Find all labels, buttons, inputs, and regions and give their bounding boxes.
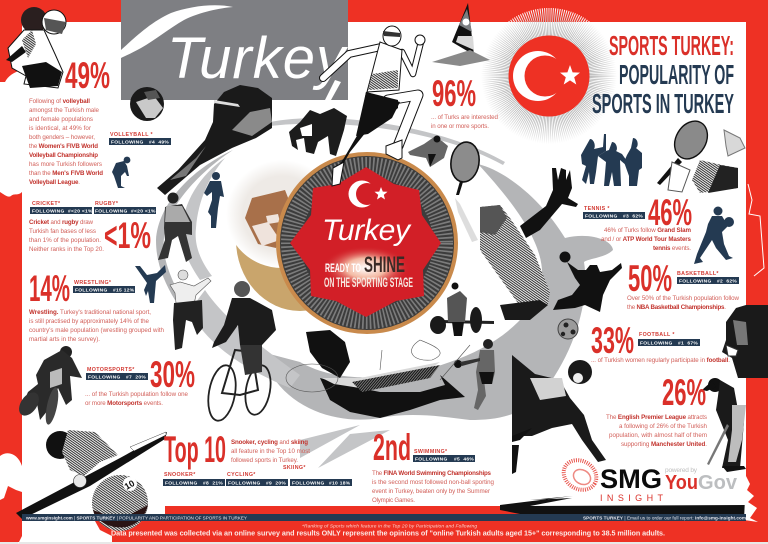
text block: cricket and rugby: Cricket and rugby draw — [29, 219, 94, 226]
text block: 26% premier league: 26% — [662, 372, 706, 413]
brush strokes near footer — [500, 184, 764, 522]
illustration: round box of Turkish delight — [226, 160, 364, 311]
text block: 26% premier league: supporting Manchester United. — [621, 441, 707, 448]
stat bar: volleyball: #4 49% — [149, 140, 169, 146]
stat bar: skiing — [283, 465, 352, 486]
stat bar: volleyball — [109, 132, 171, 146]
illustration: footballer with raised arm and racket — [448, 140, 578, 320]
stat bar: swimming: SWIMMING* — [414, 449, 448, 455]
stat bar: motorsports — [86, 367, 148, 380]
illustration: snooker player and cue — [16, 430, 167, 519]
text block: 50% basketball: the NBA Basketball Championships. — [627, 304, 726, 311]
icon: snooker ball 10: 10 — [123, 478, 136, 492]
text block: 49% volleyball: the Women's FIVB World — [29, 143, 98, 150]
illustration: tennis player top right — [657, 115, 745, 193]
header banner: Turkey logo — [121, 0, 348, 100]
stat bar: volleyball: FOLLOWING — [111, 140, 144, 146]
text block: 2nd swimming: event in Turkey, beaten only by the Summer — [372, 488, 490, 495]
stat bar: wrestling: FOLLOWING — [75, 288, 108, 294]
stat bar: cycling — [226, 472, 288, 486]
stat bar: wrestling: WRESTLING* — [74, 280, 112, 286]
badge: Turkey ready to shine: Turkey — [322, 214, 412, 247]
stat bar: wrestling: #15 12% — [113, 288, 135, 294]
illustration: sprinter — [323, 26, 425, 186]
stat bar: basketball — [677, 271, 739, 284]
text block: 14% wrestling: Wrestling. Turkey's traditional national sport, — [29, 309, 151, 316]
text block: 96% interested: ... of Turks are interested — [431, 114, 499, 121]
stat bar: volleyball: VOLLEYBALL * — [110, 132, 154, 138]
illustration: golfer — [702, 378, 746, 472]
badge: Turkey ready to shine: ON THE SPORTING STAGE — [324, 275, 413, 290]
stat bar: football: FOOTBALL * — [639, 332, 675, 338]
text block: 14% wrestling — [29, 268, 165, 343]
text block: 14% wrestling: martial arts in the survey). — [29, 336, 100, 343]
icon: small tennis athlete — [408, 136, 448, 167]
text block: cricket and rugby: than 1% of the population. — [29, 237, 101, 244]
text block: 30% motorsports — [85, 354, 195, 407]
illustration: swimmer — [286, 330, 470, 418]
text block: 49% volleyball: and female populations — [29, 116, 93, 123]
text block: top 10: followed sports in Turkey. — [231, 457, 298, 464]
footnote: ranking note: *Ranking of Sports which feature in the Top 20 by Participation and Following — [302, 524, 477, 530]
stat bar: swimming — [413, 449, 475, 462]
stat bar: snooker — [163, 472, 225, 486]
stat bar: skiing: #10 18% — [329, 480, 351, 486]
icon: Turkish flag circle with sunburst — [495, 22, 603, 130]
text block: cricket and rugby: Turkish fan bases of less — [29, 228, 96, 235]
text block: 49% volleyball: than the Men's FIVB World — [29, 170, 103, 177]
text block: 14% wrestling: is still practised by approximately 14% of the — [29, 318, 150, 325]
text block: top 10: Snooker, cycling and skiing — [231, 439, 308, 446]
logo: SMG Insight powered by YouGov: Gov — [698, 472, 738, 494]
stat bar: cycling: FOLLOWING — [228, 480, 261, 486]
logo: SMG Insight powered by YouGov: powered by — [665, 467, 698, 474]
badge: Turkey ready to shine: READY TO — [325, 261, 361, 275]
stat bar: rugby — [94, 201, 156, 214]
stat bar: basketball: BASKETBALL* — [677, 271, 719, 277]
text block: 96% interested: in one or more sports. — [431, 123, 489, 130]
gray swoosh ring — [156, 118, 613, 468]
text block: 96% interested: 96% — [432, 73, 476, 114]
text block: 26% premier league — [606, 372, 708, 448]
stat bar: snooker: SNOOKER* — [164, 472, 196, 478]
icon: volleyball bending silhouette — [112, 157, 130, 188]
footer navy strip: SPORTS TURKEY | Email us to order our full report: info@smg-insight.com — [583, 516, 746, 520]
footnote: data disclaimer: Data presented was collected via an online survey and results ONLY represent the opinions of "online Turkish adults aged 15+" corresponding to 38.5 million adults. — [111, 528, 665, 538]
text block: 26% premier league: population, with almost half of them — [609, 432, 707, 439]
text block: 49% volleyball: Volleyball Championship — [29, 152, 98, 159]
logo: SMG Insight powered by YouGov — [558, 454, 738, 503]
text block: 46% tennis — [601, 192, 692, 252]
text block: 2nd swimming: The FINA World Swimming Championships — [372, 470, 492, 477]
stat bar: motorsports: #7 20% — [126, 374, 146, 380]
illustration: motocross rider — [15, 346, 82, 426]
stat bar: wrestling — [73, 280, 135, 294]
stat bar: cricket: FOLLOWING — [32, 208, 65, 214]
text block: 46% tennis: 46% — [648, 192, 692, 233]
text block: 30% motorsports: or more Motorsports events. — [85, 400, 163, 407]
stat bar: basketball: #2 62% — [717, 278, 737, 284]
text block: 30% motorsports: 30% — [150, 354, 195, 395]
text block: 46% tennis: tennis events. — [653, 245, 691, 252]
stat bar: cricket: #<20 <1% — [68, 208, 93, 214]
text block: 46% tennis: 46% of Turks follow Grand Slam — [604, 227, 691, 234]
text block: 49% volleyball: is identical, at 49% for — [29, 125, 91, 132]
text block: 33% football — [591, 320, 730, 364]
logo: SMG Insight powered by YouGov: You — [665, 472, 698, 494]
stat bar: swimming: #5 46% — [454, 456, 474, 462]
text block: top 10: Top 10 — [164, 429, 226, 470]
text block: top 10: all feature in the Top 10 most — [231, 448, 310, 455]
stat bar: rugby: #<20 <1% — [131, 208, 156, 214]
stat bar: tennis: TENNIS * — [584, 206, 610, 212]
illustration: falling footballer — [512, 355, 606, 474]
text block: 49% volleyball — [29, 55, 110, 186]
text block: 96% interested — [431, 73, 499, 130]
illustration: weightlifter — [430, 282, 494, 336]
stat bar: basketball: FOLLOWING — [679, 278, 712, 284]
icon: karate kick silhouette — [135, 265, 166, 303]
illustration: volleyball player — [6, 7, 66, 88]
text block: 49% volleyball: both genders – however, — [29, 134, 95, 141]
icon: windsurfer — [432, 3, 490, 66]
text block: 49% volleyball: amongst the Turkish male — [29, 107, 100, 114]
icon: runner silhouette — [204, 172, 224, 228]
text block: cricket and rugby: <1% — [104, 215, 151, 256]
stat bar: skiing: FOLLOWING — [292, 480, 325, 486]
text block: 14% wrestling: 14% — [29, 268, 70, 309]
text block: 49% volleyball: has more Turkish followers — [29, 161, 102, 168]
icon: three men silhouette — [581, 134, 642, 186]
stat bar: cycling: CYCLING* — [227, 472, 256, 478]
icon: football ball — [558, 319, 578, 339]
footer navy strip: www.smginsight.com | SPORTS TURKEY | POPULARITY AND PARTICIPATION OF SPORTS IN TURKEY — [25, 516, 247, 520]
text block: 26% premier league: The English Premier League attracts — [606, 414, 707, 421]
stat bar: football: #1 67% — [678, 340, 698, 346]
text block: 33% football: ... of Turkish women regularly participate in football. — [591, 357, 730, 364]
illustration: horse racing — [289, 108, 347, 156]
logo: SMG Insight powered by YouGov: INSIGHT — [600, 493, 664, 503]
icon: volleyball — [130, 87, 164, 121]
text block: 50% basketball — [627, 258, 740, 311]
icon: snooker ball 10 — [92, 475, 148, 531]
text block: 33% football: 33% — [591, 320, 634, 361]
stat bar: motorsports: MOTORSPORTS* — [87, 367, 135, 373]
stat bar: football — [638, 332, 700, 346]
illustration: handball player — [454, 339, 495, 410]
text block: 49% volleyball: 49% — [65, 55, 110, 96]
text block: 26% premier league: a following of 26% of the Turkish — [619, 423, 708, 430]
illustration: rugby player — [158, 192, 192, 262]
stat bar: cricket — [30, 201, 93, 214]
stat bar: cricket: CRICKET* — [32, 201, 61, 207]
stat bar: tennis: FOLLOWING — [585, 214, 618, 220]
illustration: high-kicking figure — [170, 270, 211, 350]
text block: 46% tennis: and / or ATP World Tour Masters — [601, 236, 692, 243]
text block: 49% volleyball: Volleyball League. — [29, 179, 80, 186]
logo: SMG Insight powered by YouGov: SMG — [600, 464, 662, 494]
text block: 2nd swimming: is the second most followed non-ball sporting — [372, 479, 495, 486]
badge: Turkey ready to shine — [276, 152, 458, 334]
stat bar: football: FOLLOWING — [640, 340, 673, 346]
text block: 2nd swimming — [372, 427, 495, 504]
text block: cricket and rugby: Neither ranks in the Top 20. — [29, 246, 104, 253]
illustration: American football helmet — [722, 305, 768, 378]
text block: 50% basketball: 50% — [628, 258, 672, 299]
text block: 14% wrestling: country's male population (wrestling grouped with — [29, 327, 165, 334]
stat bar: cycling: #9 20% — [266, 480, 286, 486]
text block: 2nd swimming: 2nd — [373, 427, 411, 468]
illustration: leaning athlete with sunglasses — [157, 85, 272, 195]
headline: sports turkey — [592, 30, 734, 119]
stat bar: snooker: #8 21% — [203, 480, 223, 486]
text block: 30% motorsports: ... of the Turkish population follow one — [85, 391, 189, 398]
stat bar: rugby: RUGBY* — [95, 201, 119, 207]
stat bar: tennis — [583, 206, 645, 220]
text block: cricket and rugby — [29, 215, 151, 256]
icon: basketball player silhouette — [694, 206, 734, 264]
header banner: Turkey logo: Turkey — [167, 26, 348, 91]
text block: 49% volleyball: Following of volleyball — [29, 98, 90, 105]
stat bar: skiing: SKIING* — [283, 465, 306, 471]
stat bar: rugby: FOLLOWING — [95, 208, 128, 214]
illustration: handball jump silhouette — [553, 252, 622, 312]
text block: 50% basketball: Over 50% of the Turkish population follow — [627, 295, 740, 302]
stat bar: tennis: #3 62% — [623, 214, 643, 220]
stat bar: motorsports: FOLLOWING — [88, 374, 121, 380]
illustration: cyclist — [204, 281, 276, 423]
stat bar: snooker: FOLLOWING — [165, 480, 198, 486]
footer navy strip — [22, 514, 746, 521]
badge: Turkey ready to shine: SHINE — [364, 252, 405, 277]
text block: 2nd swimming: Olympic Games. — [372, 497, 415, 504]
stat bar: swimming: FOLLOWING — [415, 456, 448, 462]
